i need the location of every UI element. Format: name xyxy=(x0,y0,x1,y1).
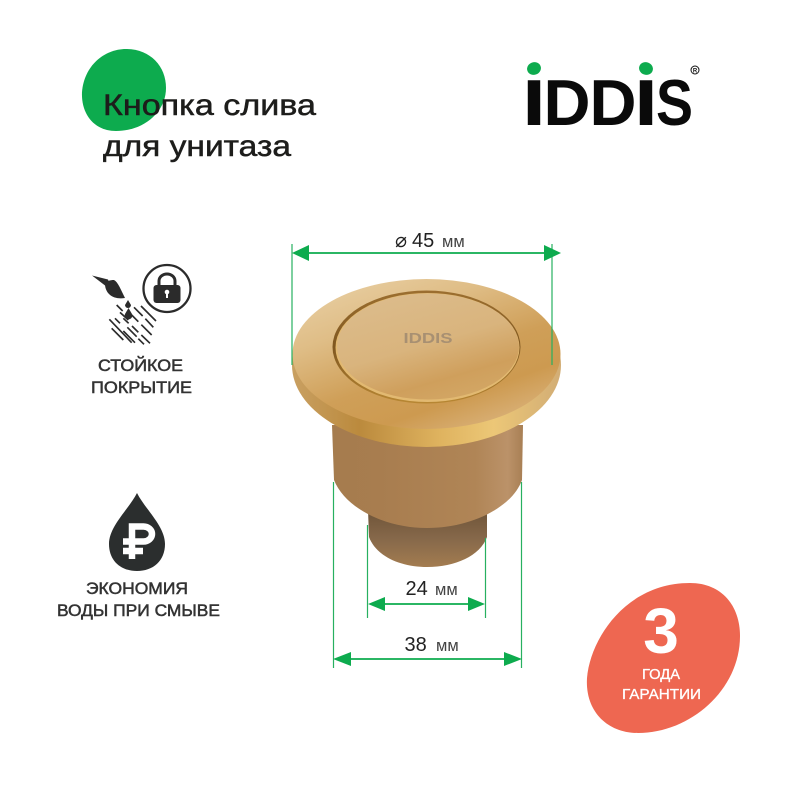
icon: paint drops xyxy=(125,300,132,319)
lower tube xyxy=(368,510,487,567)
dimension: 38 mm: 38 xyxy=(404,634,427,656)
number: 3 xyxy=(643,595,679,667)
dimension: 45 mm: ⌀ xyxy=(395,230,407,252)
heading text xyxy=(103,89,317,163)
dimension: 38 mm: мм xyxy=(436,637,459,655)
flange top xyxy=(292,279,560,429)
logo: IDDIS: D xyxy=(590,66,636,139)
logo: IDDIS: D xyxy=(544,66,590,139)
main body xyxy=(332,425,523,528)
logo: IDDIS xyxy=(522,60,699,139)
ruble sign xyxy=(123,526,152,559)
logo: IDDIS: S xyxy=(656,66,693,139)
flange edge xyxy=(292,283,561,447)
icon: paint brush xyxy=(92,276,125,298)
label: ЭКОНОМИЯ xyxy=(86,580,188,598)
dimension: 45 mm xyxy=(292,230,561,365)
button rim highlight xyxy=(336,293,520,402)
icon: drop with ruble xyxy=(109,493,165,571)
dimension: 38 mm xyxy=(333,482,522,668)
label xyxy=(91,356,192,397)
caption: ГАРАНТИИ xyxy=(622,687,701,703)
icon: coating hatch xyxy=(109,305,156,344)
dimension: 24 mm: 24 xyxy=(406,578,428,600)
button top xyxy=(337,294,519,400)
engraved logo: IDDIS xyxy=(404,330,452,347)
badge: 3 year warranty xyxy=(587,583,740,733)
dimension: 24 mm: мм xyxy=(435,581,458,599)
panel: title xyxy=(82,49,317,163)
red blob xyxy=(587,583,740,733)
label xyxy=(57,580,220,620)
logo: IDDIS: I xyxy=(634,66,658,139)
button groove xyxy=(332,290,520,404)
logo: IDDIS: R xyxy=(693,68,698,74)
logo: IDDIS: I xyxy=(522,66,546,139)
label: СТОЙКОЕ xyxy=(98,356,183,375)
icon block: durable coating xyxy=(91,265,192,397)
green blob behind title xyxy=(82,49,166,131)
dimension: 45 mm: 45 xyxy=(412,230,434,252)
icon block: water saving xyxy=(57,493,220,620)
label: ПОКРЫТИЕ xyxy=(91,379,192,397)
caption: ГОДА xyxy=(642,667,680,683)
dimension: 45 mm: мм xyxy=(442,233,465,251)
label: ВОДЫ ПРИ СМЫВЕ xyxy=(57,602,220,620)
heading text: для унитаза xyxy=(103,130,292,163)
caption xyxy=(622,667,701,703)
product: flush button photo xyxy=(292,279,561,567)
heading text: Кнопка слива xyxy=(103,89,317,122)
icon: padlock in circle xyxy=(144,265,190,312)
dimension: 24 mm xyxy=(368,525,486,618)
